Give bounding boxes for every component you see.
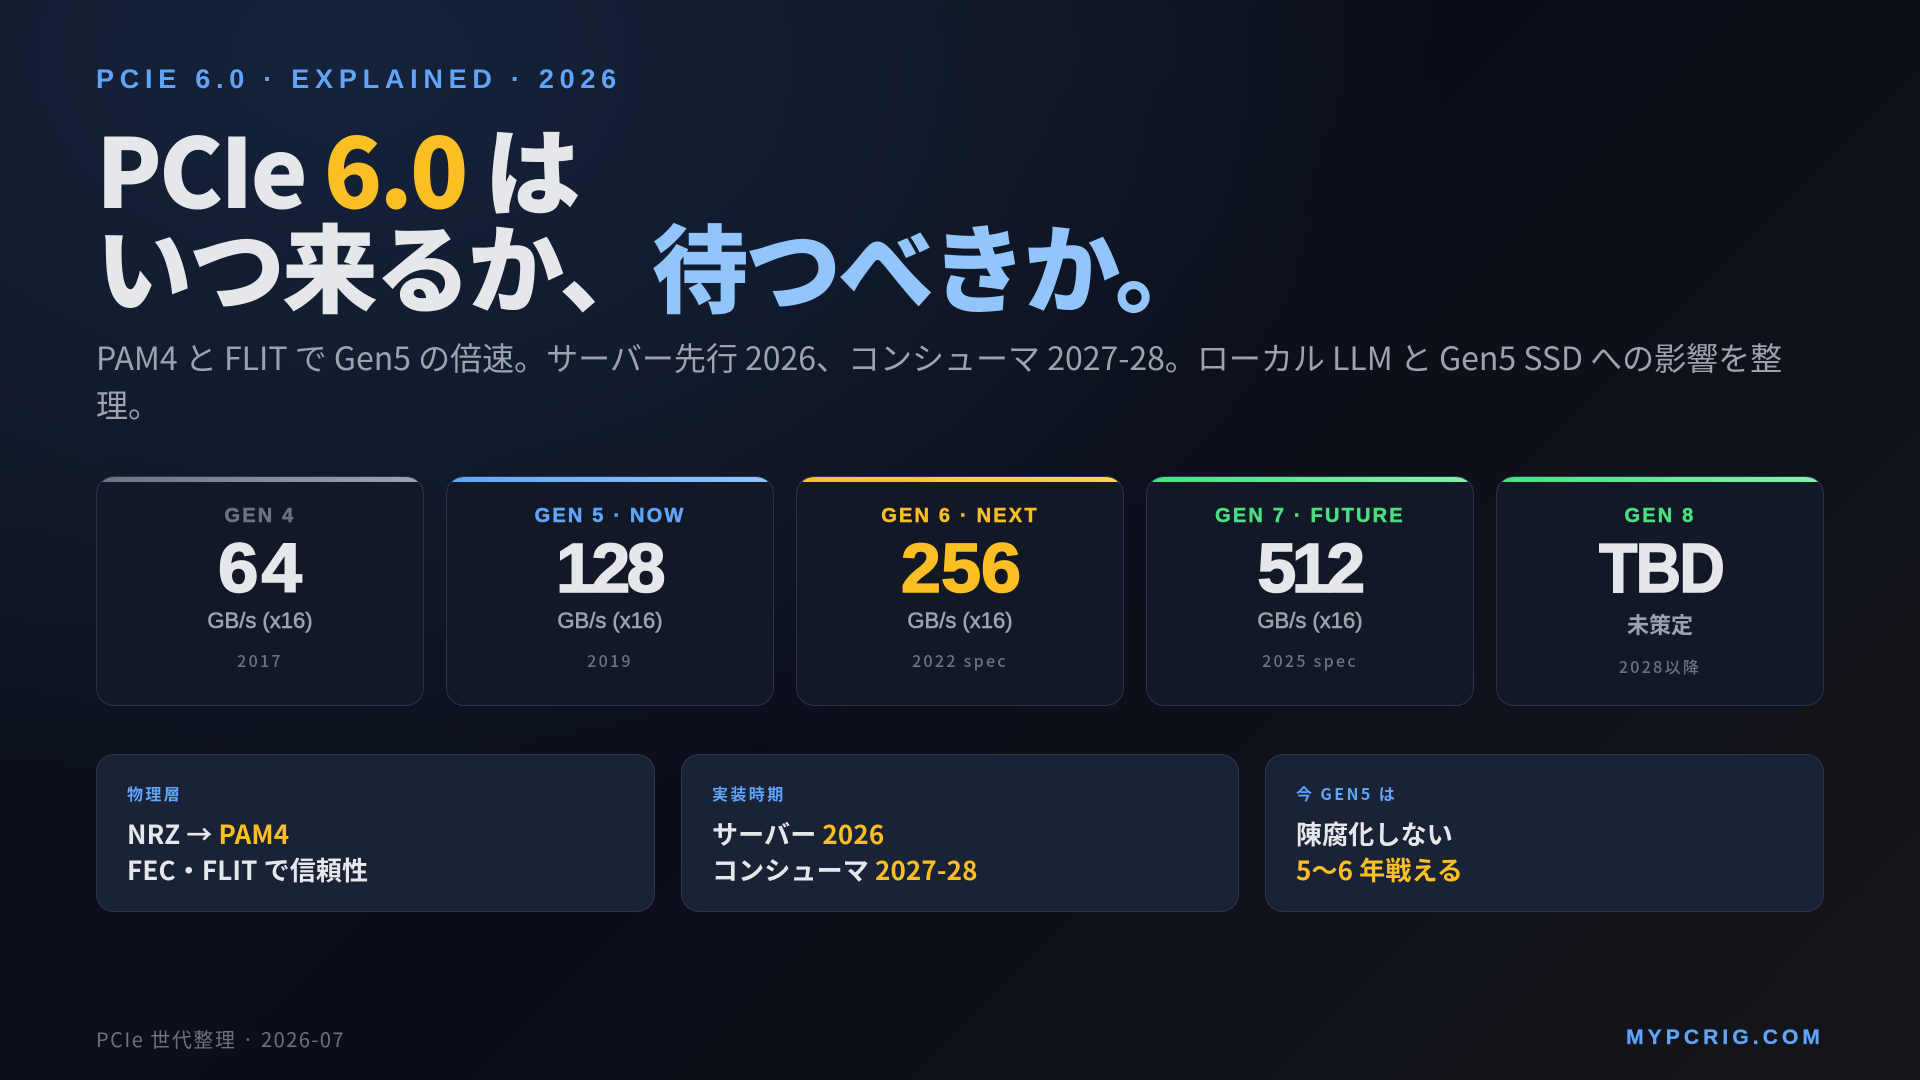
title: いつ来るか、待つべきか。 bbox=[96, 194, 1208, 333]
Gen5 today label: 今 GEN5 は bbox=[1296, 781, 1397, 805]
panel: Gen 5 card bbox=[446, 476, 774, 706]
Gen 5 year: 2019 bbox=[587, 648, 633, 672]
Gen 5 label: GEN 5 · NOW bbox=[535, 504, 685, 526]
eyebrow label: PCIE 6.0 · EXPLAINED · 2026 bbox=[96, 64, 622, 94]
panel: Gen 8 card bbox=[1496, 476, 1824, 706]
panel: Gen5 today bbox=[1265, 754, 1824, 912]
Gen 8 label: GEN 8 bbox=[1624, 504, 1696, 526]
Gen 8 speed: TBD bbox=[1599, 529, 1723, 607]
physical layer text bbox=[127, 815, 368, 888]
physical layer label: 物理層 bbox=[127, 781, 182, 805]
footer note: PCIe 世代整理 · 2026-07 bbox=[96, 1024, 345, 1053]
timing text bbox=[712, 815, 978, 888]
Gen 7 speed: 512 bbox=[1257, 529, 1361, 607]
Gen5 today text: 5〜6 年戦える bbox=[1296, 850, 1463, 888]
timing text: サーバー 2026 bbox=[712, 815, 884, 852]
Gen 6 label: GEN 6 · NEXT bbox=[881, 504, 1039, 526]
Gen5 today text bbox=[1296, 815, 1463, 888]
physical layer text: FEC・FLIT で信頼性 bbox=[127, 850, 368, 888]
Gen 4 unit: GB/s (x16) bbox=[207, 608, 313, 633]
Gen 8 unit: 未策定 bbox=[1627, 608, 1693, 640]
Gen 4 label: GEN 4 bbox=[224, 504, 296, 526]
timing text: コンシューマ 2027-28 bbox=[712, 850, 978, 888]
Gen 6 speed: 256 bbox=[901, 529, 1021, 607]
footer site name: MYPCRIG.COM bbox=[1626, 1026, 1824, 1049]
Gen 7 label: GEN 7 · FUTURE bbox=[1215, 504, 1405, 526]
Gen 4 speed: 64 bbox=[218, 529, 305, 607]
panel: physical layer bbox=[96, 754, 655, 912]
Gen 4 year: 2017 bbox=[237, 648, 283, 672]
timing label: 実装時期 bbox=[712, 781, 786, 805]
title bbox=[96, 97, 1208, 333]
physical layer text: NRZ → PAM4 bbox=[127, 815, 289, 852]
subtitle: PAM4 と FLIT で Gen5 の倍速。サーバー先行 2026、コンシューマ 2027-28。ローカル LLM と Gen5 SSD への影響を整理。 bbox=[96, 334, 1782, 426]
Gen 7 unit: GB/s (x16) bbox=[1257, 608, 1363, 633]
Gen 8 year: 2028以降 bbox=[1619, 654, 1701, 678]
Gen 6 unit: GB/s (x16) bbox=[907, 608, 1013, 633]
Gen 5 unit: GB/s (x16) bbox=[557, 608, 663, 633]
Gen5 today text: 陳腐化しない bbox=[1296, 815, 1453, 852]
panel: implementation timing bbox=[681, 754, 1239, 912]
Gen 6 year: 2022 spec bbox=[912, 648, 1008, 672]
title: PCIe 6.0 は bbox=[96, 97, 577, 236]
panel: Gen 4 card bbox=[96, 476, 424, 706]
Gen 5 speed: 128 bbox=[556, 529, 662, 607]
panel: Gen 6 card bbox=[796, 476, 1124, 706]
Gen 7 year: 2025 spec bbox=[1262, 648, 1358, 672]
panel: Gen 7 card bbox=[1146, 476, 1474, 706]
